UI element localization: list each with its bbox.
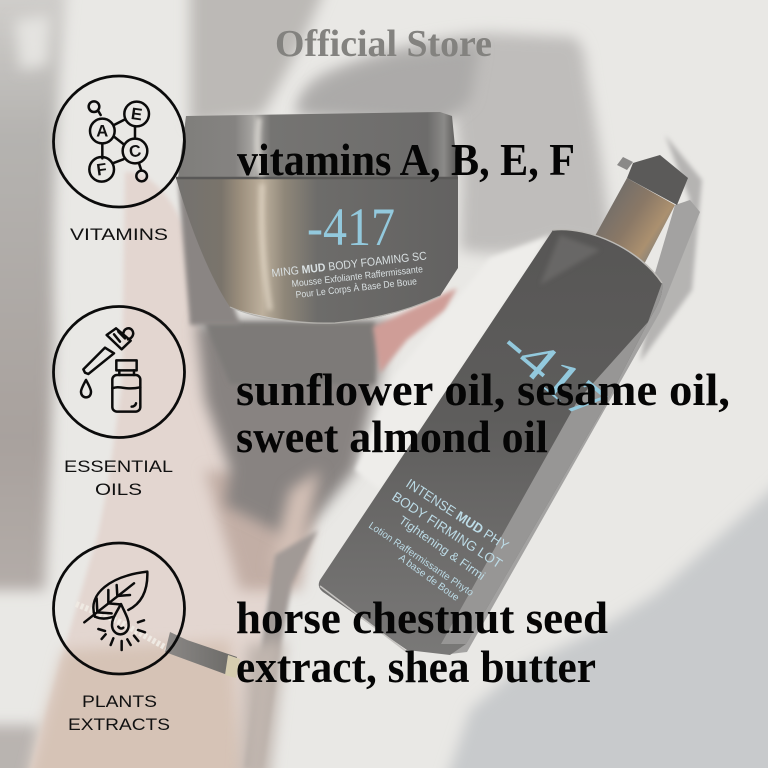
jar logo: -417 xyxy=(307,197,395,257)
label: vitamins: VITAMINS xyxy=(70,225,168,244)
product: mud foaming scrub jar xyxy=(176,112,458,323)
bracelet xyxy=(76,604,240,678)
icon: vitamins molecule: A xyxy=(96,122,108,141)
icon: vitamins molecule: C xyxy=(128,141,142,161)
bottle label text xyxy=(366,476,511,604)
bottle label text: A base de Boue xyxy=(396,553,461,604)
label: plants extracts xyxy=(68,692,170,734)
bottle label text: Lotion Raffermissante Phyto xyxy=(366,520,476,599)
icon: vitamins molecule: F xyxy=(95,159,108,180)
icon: leaf with droplet xyxy=(54,543,184,674)
heading: plants list: extract, shea butter xyxy=(236,642,596,692)
bottle label text: INTENSE MUD PHY xyxy=(403,476,511,553)
product: firming lotion pump bottle xyxy=(319,155,700,655)
heading: oils list xyxy=(236,365,730,462)
icon: vitamins molecule: E xyxy=(130,104,143,124)
title: official store: Official Store xyxy=(275,23,492,65)
label: plants extracts: PLANTS xyxy=(82,692,157,711)
jar label text: Mousse Exfoliante Raffermissante xyxy=(291,264,423,290)
jar label text: MING MUD BODY FOAMING SC xyxy=(271,250,427,280)
heading: oils list: sunflower oil, sesame oil, xyxy=(236,365,730,415)
heading: plants list xyxy=(236,593,608,692)
heading: plants list: horse chestnut seed xyxy=(236,593,608,643)
bottle logo: -417 xyxy=(490,313,618,434)
jar label text xyxy=(271,250,427,301)
heading: vitamins list: vitamins A, B, E, F xyxy=(237,135,575,185)
label: essential oils: ESSENTIAL xyxy=(64,457,173,476)
heading: oils list: sweet almond oil xyxy=(236,412,548,462)
panel: vitamins xyxy=(54,76,184,244)
icon: vitamins molecule xyxy=(54,76,184,207)
label: essential oils: OILS xyxy=(95,480,142,499)
panel: plants extracts xyxy=(54,543,184,734)
bottle label text: Tightening & Firmi xyxy=(396,513,488,583)
pink hand and arm xyxy=(25,172,392,768)
panel: essential oils xyxy=(54,306,184,499)
label: plants extracts: EXTRACTS xyxy=(68,715,170,734)
label: essential oils xyxy=(64,457,173,499)
jar label text: Pour Le Corps À Base De Boue xyxy=(295,276,418,301)
icon: dropper and bottle xyxy=(54,306,184,438)
bottle label text: BODY FIRMING LOT xyxy=(389,489,505,571)
